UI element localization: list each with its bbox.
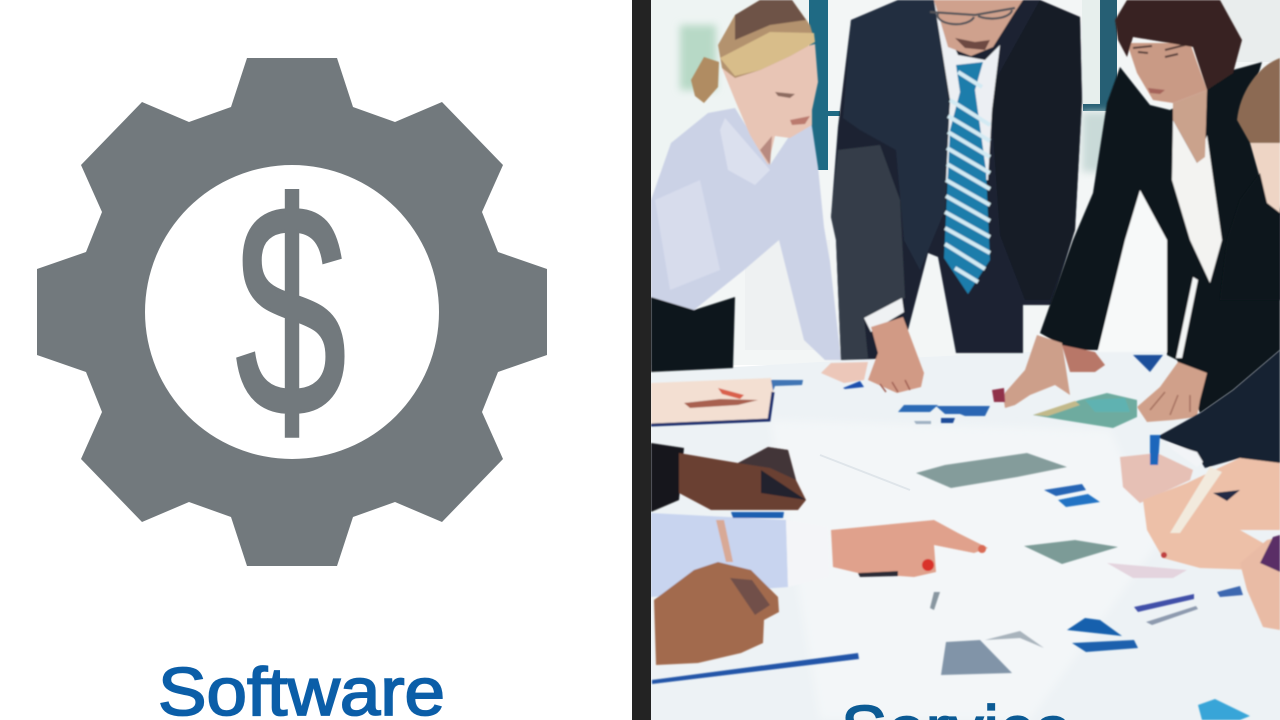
neck and face (722, 44, 818, 165)
icon: gear with dollar sign (37, 58, 547, 566)
hair (1115, 0, 1242, 90)
trousers (651, 297, 735, 372)
jacket (1040, 62, 1280, 413)
panel: service photo (651, 0, 1280, 720)
photo: documents on table (651, 355, 1250, 720)
photo: hands and arms at lower left (651, 443, 988, 665)
photo background: office room (651, 0, 1280, 365)
far right hand (1240, 537, 1280, 630)
jacket and trousers (831, 0, 1082, 360)
hand with blue pen (1120, 453, 1193, 503)
writing hand (1143, 458, 1280, 570)
photo: man in dark suit and striped tie (821, 0, 1082, 393)
photo: hands with pen at lower right (1120, 350, 1280, 630)
shirt sleeve (651, 513, 788, 597)
hands (1003, 335, 1070, 408)
green map document (1033, 393, 1137, 428)
hands (868, 317, 924, 393)
panel: software (0, 0, 632, 720)
background gap inside jacket (1098, 190, 1167, 352)
cuff (864, 298, 904, 332)
lower hand (654, 562, 779, 665)
photo: table surface (651, 345, 1280, 720)
dark hand with pen (651, 443, 684, 512)
blouse (651, 108, 841, 360)
photo: woman in light blouse (651, 0, 841, 372)
photo: woman in black suit, right (1003, 0, 1280, 422)
face (1127, 43, 1207, 103)
hair (718, 0, 815, 78)
white pen (1170, 467, 1222, 533)
shirt (934, 0, 1000, 180)
striped tie (944, 62, 990, 294)
blouse (1172, 120, 1222, 283)
photo: man at right edge (1236, 57, 1280, 301)
divider bar (632, 0, 651, 720)
head (934, 0, 1023, 56)
navy sleeve (1157, 350, 1280, 472)
icon: gear with dollar sign: $ (235, 142, 347, 480)
hand with red nails (831, 520, 988, 577)
pencil (716, 520, 733, 562)
